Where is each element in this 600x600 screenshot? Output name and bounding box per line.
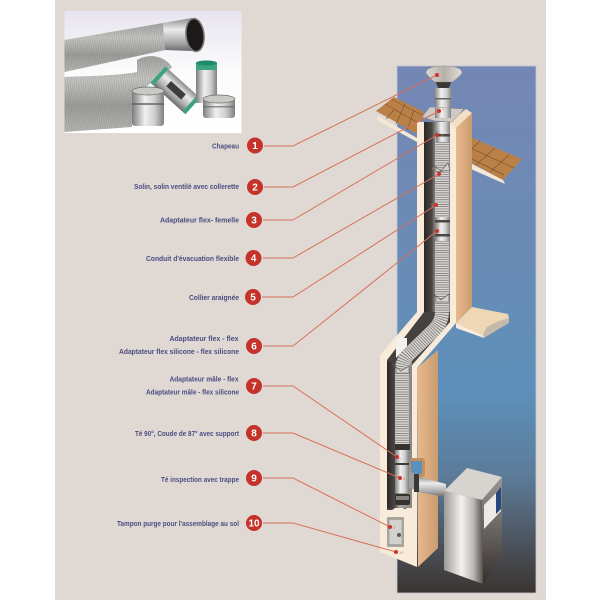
spider collars <box>392 163 450 373</box>
product photo: flexible liner and connectors <box>64 11 242 133</box>
left roof <box>376 97 424 142</box>
label 1: Chapeau <box>212 142 239 150</box>
label 7: 7 <box>251 382 257 392</box>
label 5 <box>189 289 261 305</box>
small callout numbers: 1 <box>441 70 444 75</box>
label 8: Té 90°, Coude de 87° avec support <box>135 429 240 438</box>
label 5: 5 <box>250 292 256 304</box>
small callout numbers: 9 <box>393 525 396 530</box>
flashing with collar <box>422 107 464 131</box>
cap <box>426 66 462 120</box>
furnace <box>444 468 502 584</box>
flexible liner <box>402 135 442 450</box>
wall opening <box>410 458 425 477</box>
small callout numbers: 2 <box>442 106 445 111</box>
blue backdrop <box>397 66 536 593</box>
label 4: 4 <box>251 254 257 264</box>
small callout numbers: 6 <box>436 223 439 228</box>
adapter top <box>436 131 450 142</box>
label 8: 8 <box>251 428 257 440</box>
label 7: Adaptateur mâle - flex <box>170 374 238 384</box>
label 4: Conduit d'évacuation flexible <box>146 254 239 263</box>
leader lines <box>262 75 439 552</box>
label 5: Collier araignée <box>189 293 239 302</box>
right roof <box>455 137 522 184</box>
label 10 <box>117 515 262 531</box>
label 6: Adaptateur flex silicone - flex silicone <box>119 347 239 356</box>
small callout numbers: 3 <box>441 132 444 137</box>
small callout numbers: 5 <box>431 202 434 207</box>
label 4 <box>146 250 262 266</box>
label 1: 1 <box>252 141 258 152</box>
label 7 <box>146 374 262 396</box>
small callout numbers: 4 <box>432 166 435 171</box>
label 1 <box>212 138 263 154</box>
label 3 <box>160 212 262 228</box>
label 6: Adaptateur flex - flex <box>170 334 239 343</box>
label 2: 2 <box>252 182 258 194</box>
chimney cutaway <box>380 109 472 567</box>
small callout numbers: 7 <box>399 457 402 462</box>
green-ended adapter <box>151 66 200 114</box>
label 10: Tampon purge pour l'assemblage au sol <box>117 519 239 528</box>
small callout numbers: 10 <box>399 550 404 555</box>
label 3: 3 <box>251 216 257 226</box>
small callout numbers: 8 <box>403 476 406 481</box>
label 2 <box>134 179 263 195</box>
flue pipe to furnace <box>414 474 446 497</box>
label 6: 6 <box>251 342 257 352</box>
label 9: 9 <box>251 474 257 484</box>
adapter flex-flex <box>435 217 450 241</box>
label 9: Té inspection avec trappe <box>161 475 239 484</box>
balcony slab <box>456 307 509 338</box>
label 2: Solin, solin ventilé avec collerette <box>134 182 239 191</box>
small callout numbers <box>393 70 445 555</box>
label 8 <box>135 425 262 441</box>
label 6 <box>119 334 262 356</box>
label 7: Adaptateur mâle - flex silicone <box>146 388 239 396</box>
label 9 <box>161 470 262 486</box>
inspection door <box>387 517 404 547</box>
label 3: Adaptateur flex- femelle <box>160 216 239 224</box>
target dots <box>388 73 441 554</box>
label 10: 10 <box>248 518 260 530</box>
male adapter and tee <box>395 444 416 505</box>
